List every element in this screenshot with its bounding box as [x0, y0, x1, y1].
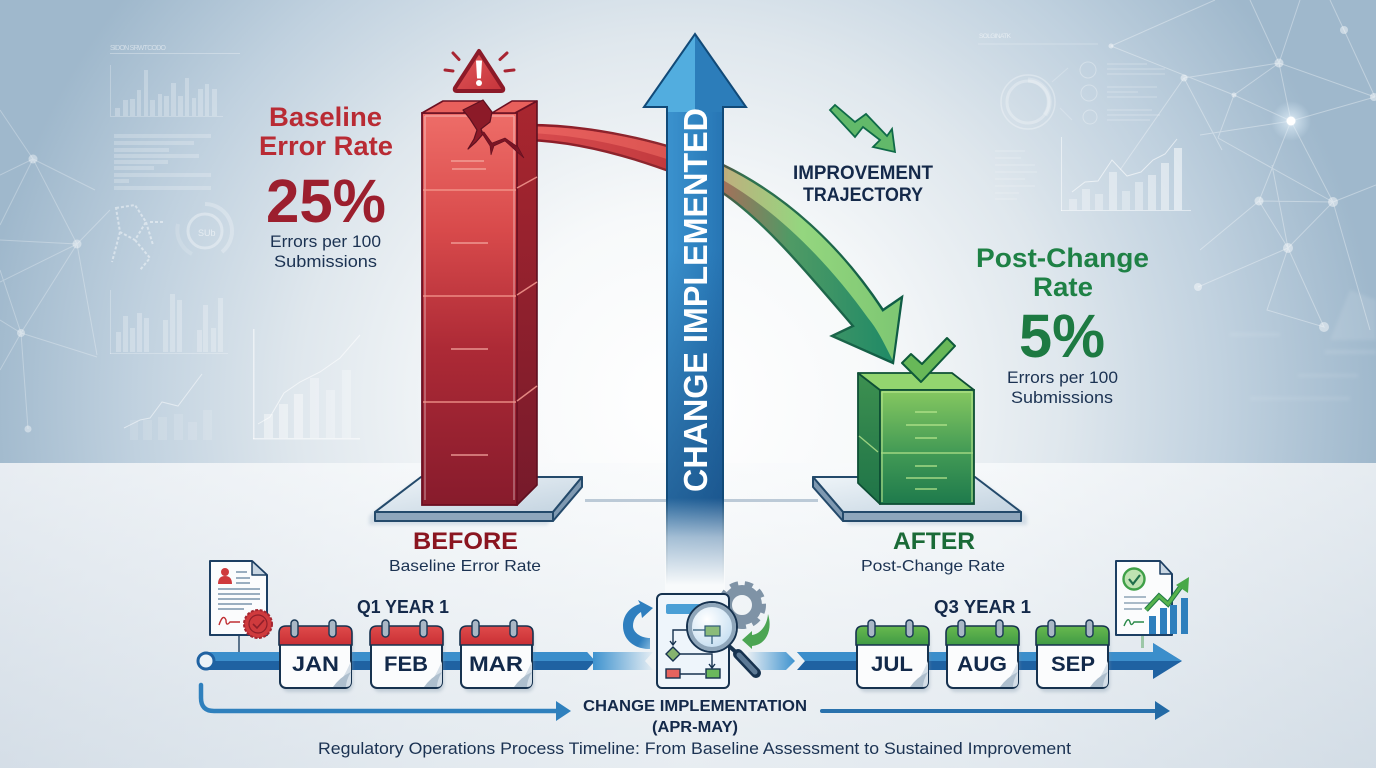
icon: blue cycle arrow	[623, 600, 653, 649]
background: faint ring dial top right	[978, 33, 1165, 129]
label: q1 year 1: Q1 YEAR 1	[357, 597, 449, 617]
arrow head left facet	[644, 34, 695, 112]
arrow body highlight	[528, 126, 900, 360]
floor line right	[723, 499, 818, 502]
text: after label	[861, 528, 1005, 575]
background: faint bar chart top left	[110, 45, 240, 117]
right chevron fading	[748, 652, 795, 670]
background: faint molecule and ring left	[112, 204, 232, 270]
text: post-change rate: Rate	[1033, 272, 1093, 302]
magnifier lens	[687, 602, 737, 652]
flow diamond	[666, 647, 680, 661]
tick marks	[451, 161, 488, 455]
document panel	[657, 594, 729, 688]
calendar: sep: SEP	[1051, 653, 1095, 676]
blue header pill	[666, 604, 702, 614]
text: after label: Post-Change Rate	[861, 558, 1005, 575]
calendar: aug: AUG	[957, 653, 1007, 676]
icon: green check on bar	[902, 338, 955, 382]
arrow body dark	[528, 125, 902, 363]
background: faint horizontal bars left	[114, 134, 211, 190]
timeline bar	[198, 643, 1182, 679]
text: before label: Baseline Error Rate	[389, 558, 541, 575]
top face	[858, 373, 974, 390]
label: change implementation	[583, 698, 807, 736]
caption: Regulatory Operations Process Timeline: From Baseline Assessment to Sustained Improvement	[318, 739, 1071, 758]
top face	[422, 101, 483, 113]
left chevron fading	[593, 652, 653, 670]
arrow outline	[644, 34, 746, 590]
flow green box	[706, 669, 720, 678]
background: lower floor	[0, 463, 1376, 768]
front face	[422, 113, 517, 505]
change implemented arrow	[644, 34, 746, 592]
flow red box	[666, 669, 680, 678]
timeline connector: left document stem	[238, 634, 240, 652]
green after bar	[858, 373, 974, 504]
calendar: jul: JUL	[871, 653, 913, 676]
magnifier handle	[738, 654, 756, 673]
icon: warning triangle	[445, 51, 514, 91]
background: faint combo chart lower left	[253, 329, 360, 440]
arrow main shape	[644, 34, 746, 590]
flow chart	[670, 630, 715, 674]
background: faint line chart left	[124, 374, 212, 440]
text: improvement trajectory: IMPROVEMENT	[793, 163, 933, 184]
calendar: jan: JAN	[292, 653, 339, 676]
crack	[463, 100, 492, 149]
text: baseline error rate: Errors per 100	[270, 232, 381, 251]
background: faint legend right	[995, 150, 1037, 200]
side face	[515, 101, 537, 505]
connecting trajectory arrow	[528, 125, 902, 363]
background: faint bar chart top left: SIDON SRWTCODO	[110, 45, 167, 52]
text: post-change rate: 5%	[1019, 302, 1105, 370]
background: network right	[1108, 0, 1376, 332]
icon: improvement zigzag arrow	[830, 105, 895, 152]
calendar: mar	[460, 620, 534, 692]
arrow text: CHANGE IMPLEMENTED	[677, 108, 714, 492]
icon: baseline document	[210, 561, 272, 638]
text: post-change rate: Errors per 100	[1007, 368, 1118, 387]
text: post-change rate: Post-Change	[976, 243, 1149, 273]
front inner highlight	[425, 116, 514, 500]
background: faint molecule and ring left: SUb	[198, 228, 216, 238]
calendar: feb: FEB	[384, 653, 428, 676]
start node	[198, 653, 214, 669]
left bar segment	[205, 652, 595, 670]
text: baseline error rate: 25%	[266, 167, 386, 235]
text: baseline error rate: Error Rate	[259, 131, 393, 161]
text: improvement trajectory	[793, 163, 933, 206]
red before bar	[422, 100, 537, 505]
timeline connector: right document stem	[1141, 634, 1144, 648]
segment dividers	[423, 177, 537, 402]
background: faint ring dial top right: SOLGINATK	[979, 33, 1012, 40]
shaft fade to floor	[665, 498, 725, 592]
text: after label: AFTER	[893, 528, 975, 555]
text: post-change rate: Submissions	[1011, 388, 1113, 407]
calendar: jul	[856, 620, 930, 692]
text: baseline error rate: Baseline	[269, 102, 382, 132]
text: baseline error rate	[259, 102, 393, 271]
arrow: left timeline span	[201, 685, 571, 721]
floor line left	[585, 499, 667, 502]
calendar: feb	[370, 620, 444, 692]
background: faint grouped bars left	[110, 290, 228, 354]
background: network left	[0, 110, 110, 432]
right bar segment	[797, 643, 1182, 679]
arrow: right timeline span	[822, 701, 1170, 720]
label: change implementation: (APR-MAY)	[652, 719, 738, 736]
background: blurred shapes lower right	[1230, 290, 1376, 400]
text: baseline error rate: Submissions	[274, 252, 377, 271]
text: post-change rate	[976, 243, 1149, 407]
arrow head right facet	[695, 34, 746, 112]
front highlight and divider	[859, 392, 973, 502]
calendar: mar: MAR	[469, 653, 523, 676]
front face	[880, 390, 974, 504]
icon: green cycle arrow	[742, 614, 770, 649]
text: before label	[389, 528, 541, 575]
shaft darkening	[667, 250, 723, 590]
red platform	[369, 477, 582, 525]
calendar: jan	[279, 620, 353, 692]
label: q3 year 1: Q3 YEAR 1	[934, 597, 1031, 617]
background: faint combo chart top right	[1061, 137, 1191, 211]
text: before label: BEFORE	[413, 528, 518, 555]
background: upper panel	[0, 0, 1376, 464]
calendar: sep	[1036, 620, 1110, 692]
icon: gear	[721, 584, 763, 626]
icon: process review center	[623, 584, 770, 688]
tick marks	[906, 412, 947, 489]
calendar: aug	[946, 620, 1020, 692]
green platform	[813, 477, 1027, 525]
icon: results document	[1116, 561, 1189, 635]
text: improvement trajectory: TRAJECTORY	[803, 185, 923, 206]
side face	[858, 373, 880, 504]
label: change implementation: CHANGE IMPLEMENTATION	[583, 698, 807, 715]
